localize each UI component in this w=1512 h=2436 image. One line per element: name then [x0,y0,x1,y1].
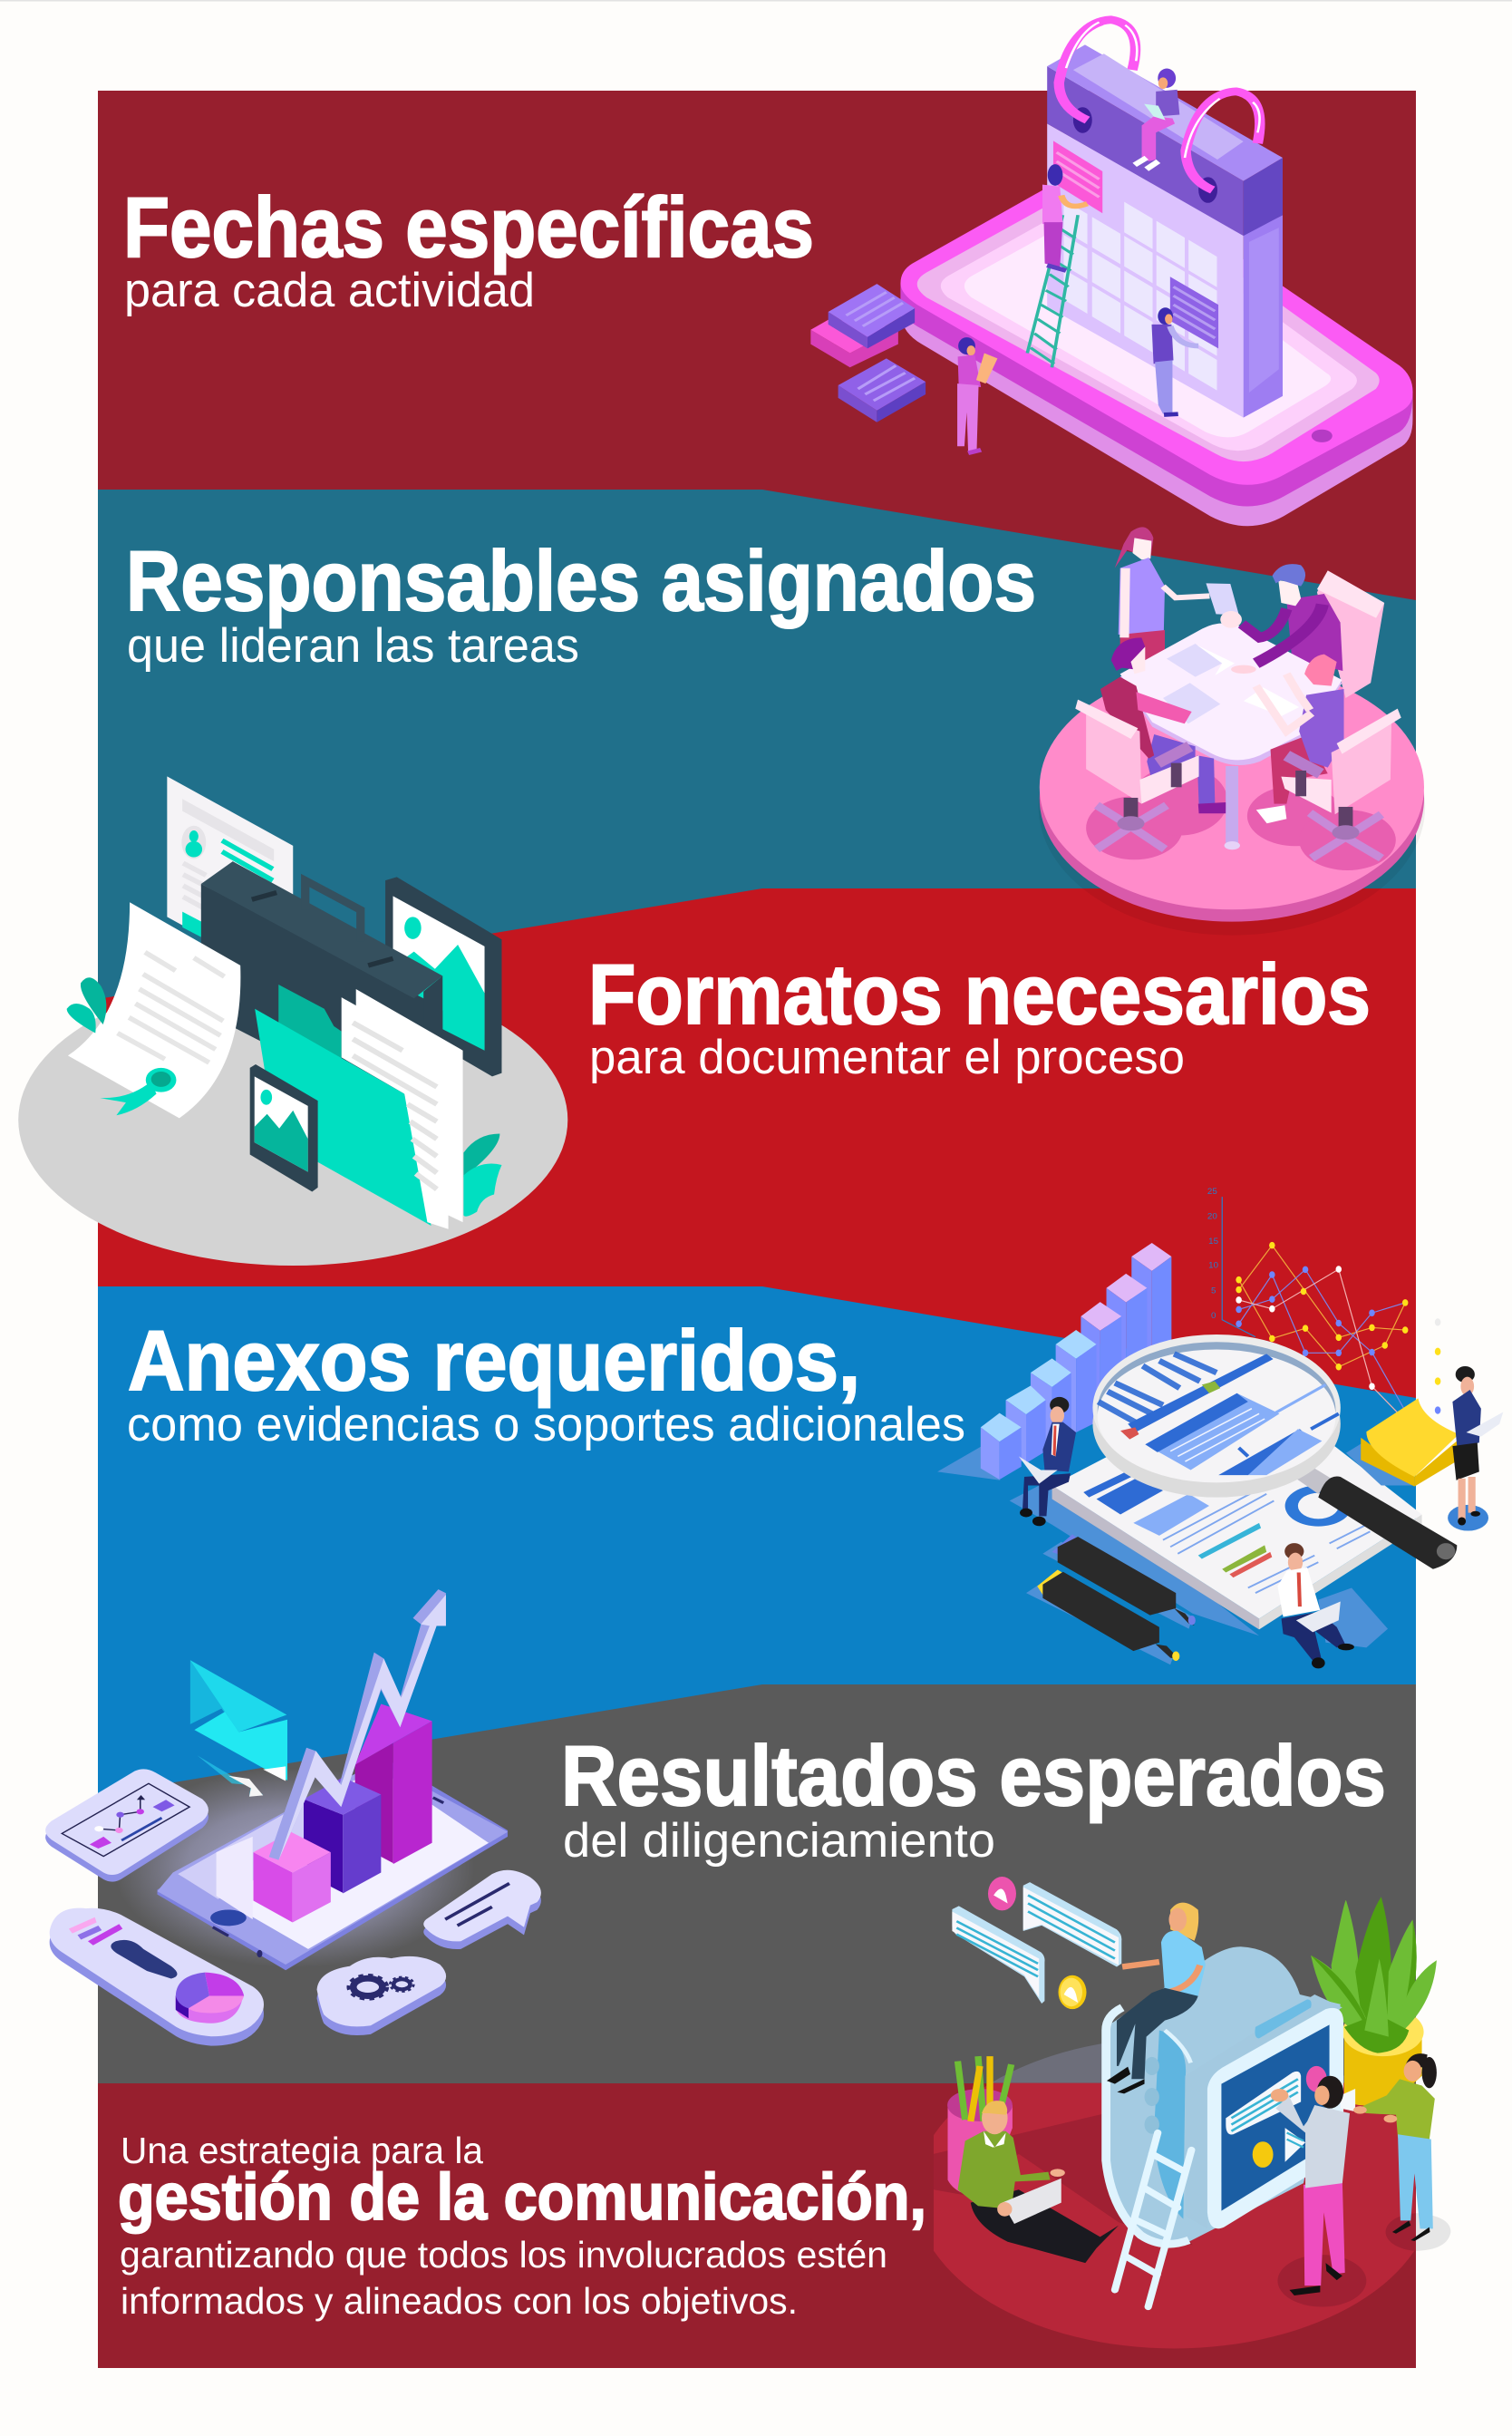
panel: anexos background [98,1286,1416,1795]
line 2: informados y alineados con los objetivos. [121,2280,798,2322]
line chart [1207,1186,1440,1443]
phone body [900,160,1413,526]
stacked boxes [810,284,926,422]
subheading: responsables: que lideran las tareas [127,619,579,673]
standing woman [1115,527,1239,665]
sticky notes [1346,1398,1459,1487]
illustration: growth chart on tablet [45,1589,541,2046]
card: speech bubble [423,1870,541,1949]
seated man right arms [1220,605,1323,674]
text block: gestion: Una estrategia para la [121,2130,483,2171]
person on top [1107,1903,1206,2093]
man at screen [1271,2076,1350,2295]
person with folder [957,337,997,453]
framed picture [385,877,501,1076]
line chart: 5 [1211,1286,1216,1295]
heading: gestion: gestión de la comunicación, [118,2161,926,2234]
pen cup [947,2056,1013,2198]
glow [114,1768,475,1967]
floor disk on red [934,2083,1416,2348]
grey platform [18,974,567,1266]
right chair [1281,709,1401,814]
table [1120,623,1342,849]
line chart: 0 [1211,1310,1216,1320]
woman shadow off panel [1416,2213,1450,2251]
plant right [463,1134,501,1217]
person on ladder [1042,164,1088,271]
back chair [1317,570,1384,698]
badges [988,1877,1087,2009]
right woman [1256,655,1344,823]
text block: gestion [118,2130,926,2322]
small tablet [250,1064,318,1191]
line chart: 20 [1207,1211,1217,1221]
sheet shadow [1010,1477,1388,1664]
ring back [1060,20,1136,82]
seated man bottom [1277,1543,1354,1668]
floor disk on grey [993,2043,1344,2083]
line chart: 10 [1208,1260,1218,1269]
subheading: anexos: como evidencias o soportes adicionales [127,1398,965,1451]
ladder [1027,215,1078,367]
panel: resultados background [98,1684,1416,2088]
panel: gestion background [98,2083,1416,2368]
bar tall [355,1703,432,1864]
left chair base [1097,798,1167,849]
line 1: garantizando que todos los involucrados estén [120,2234,887,2276]
envelope [190,1660,287,1797]
bar medium [304,1777,381,1894]
panel: formatos background [98,888,1416,1414]
seated man left [1019,1397,1076,1526]
line chart: 25 [1207,1186,1217,1196]
briefcase [201,861,442,1125]
line chart: 15 [1208,1236,1218,1246]
man on floor [958,2101,1119,2263]
plant [1311,1897,1437,2105]
left chair [1075,700,1199,804]
plant left [67,977,106,1034]
standing woman [1448,1366,1503,1531]
heading: anexos: Anexos requeridos, [128,1313,860,1408]
rising arrow [269,1589,446,1860]
highlighters [1037,1534,1196,1661]
heading: resultados [561,1728,1386,1868]
rings front [1059,22,1260,190]
CV page [167,776,293,986]
right chair base [1310,807,1381,859]
illustration: briefcase and documents [18,776,567,1266]
subheading: fechas: para cada actividad [124,264,535,317]
illustration: meeting table on pink disk [1039,527,1425,936]
panel: responsables background [98,490,1416,999]
stacked papers [342,989,463,1229]
calendar body [1047,44,1283,418]
card: pill with pie [50,1908,264,2046]
heading: responsables [126,533,1036,673]
watch body [1106,1946,1355,2246]
chat bubbles [952,1882,1121,2004]
woman floor shadow [1385,2214,1416,2250]
magnifier lens [1092,1334,1341,1498]
cube [254,1832,331,1923]
heading: formatos [588,946,1371,1084]
report sheet [1052,1382,1422,1629]
heading: fechas [123,180,814,317]
heading: formatos: Formatos necesarios [588,946,1371,1042]
man floor shadow [1277,2255,1366,2307]
heading: anexos [127,1313,965,1451]
panel: fechas background [98,91,1416,635]
tablet [158,1761,508,1970]
seated man right body [1273,564,1342,671]
heading: resultados: Resultados esperados [561,1728,1386,1823]
illustration: calendar on phone [810,20,1413,526]
person at note [1151,307,1198,414]
person sitting on calendar [1135,69,1179,170]
card: cloud with gears [317,1956,446,2035]
ladder [1115,2133,1191,2307]
left seated man [1100,637,1226,813]
handle [1289,1461,1457,1569]
bar steps [937,1243,1171,1480]
folder [255,985,431,1226]
dark floor band [934,2113,1193,2245]
subheading: formatos: para documentar el proceso [589,1031,1185,1084]
illustration: magnifying glass over report [937,1186,1503,1668]
heading: responsables: Responsables asignados [126,533,1036,628]
card: line chart [45,1769,208,1882]
illustration: smartwatch and team [916,1877,1450,2348]
woman right [1353,2053,1437,2241]
disk [1039,665,1425,936]
certificate [68,902,240,1118]
subheading: resultados: del diligenciamiento [563,1814,995,1868]
heading: fechas: Fechas específicas [123,180,814,275]
